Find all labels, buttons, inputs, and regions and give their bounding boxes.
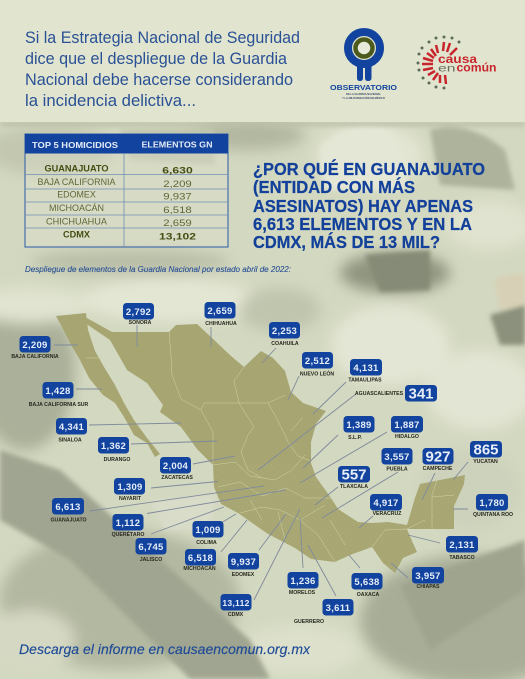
heading: question	[253, 158, 485, 252]
heading: question: ¿POR QUÉ EN GUANAJUATO	[253, 158, 485, 179]
map of Mexico	[56, 313, 470, 575]
state: Tamaulipas	[348, 359, 382, 384]
state: Sinaloa	[56, 418, 87, 444]
state: Oaxaca	[352, 573, 382, 598]
state: Jalisco: JALISCO	[140, 557, 162, 563]
table rows: CHICHUAHUA	[46, 216, 108, 227]
state: Aguascalientes: AGUASCALIENTES	[355, 391, 404, 397]
state: Nuevo León	[300, 352, 334, 378]
intro text: Si la Estrategia Nacional de Seguridad	[25, 29, 300, 47]
heading: question: CDMX, MÁS DE 13 MIL?	[253, 231, 440, 252]
state: Quintana Roo: 1,780	[479, 498, 505, 509]
state: Colima	[192, 521, 224, 546]
state: CDMX: 13,112	[222, 598, 250, 608]
state: Puebla	[382, 448, 412, 472]
state: Zacatecas: 2,004	[163, 461, 189, 472]
state: Campeche: 927	[425, 448, 451, 466]
state: Coahuila: COAHUILA	[271, 341, 299, 347]
state: Hidalgo: 1,887	[394, 420, 420, 431]
state: Sonora	[123, 303, 154, 326]
state: Oaxaca: OAXACA	[357, 592, 379, 598]
state: Campeche	[422, 448, 454, 472]
state: Sinaloa: SINALOA	[58, 438, 82, 444]
state: Chihuahua: 2,659	[207, 306, 233, 317]
state: Hidalgo: HIDALGO	[395, 434, 419, 440]
state: Tabasco: TABASCO	[449, 555, 475, 561]
table rows: EDOMEX	[57, 190, 96, 201]
state: Guanajuato: 6,613	[55, 502, 81, 513]
table: top 5 homicidios	[25, 134, 228, 247]
table rows: GUANAJUATO	[44, 164, 108, 175]
logo: Causa en Común: causa	[438, 54, 478, 66]
table rows: BAJA CALIFORNIA	[38, 177, 116, 188]
state: Tabasco: 2,131	[449, 540, 475, 551]
state: Veracruz: 4,917	[373, 498, 399, 509]
state: Tabasco	[446, 536, 478, 561]
state: Puebla: PUEBLA	[386, 466, 408, 472]
state: Veracruz	[370, 494, 402, 517]
state: Oaxaca: 5,638	[354, 577, 380, 588]
table rows	[38, 164, 196, 242]
state: Baja California: 2,209	[22, 340, 48, 351]
table header	[25, 134, 228, 154]
state: Quintana Roo	[473, 494, 513, 518]
state: Campeche: CAMPECHE	[423, 466, 453, 472]
state: S.L.P.: 1,389	[346, 420, 372, 431]
state: Puebla: 3,557	[384, 452, 410, 463]
state: Chiapas	[412, 567, 444, 590]
state: Michoacán: MICHOACÁN	[183, 565, 216, 572]
table rows: 2,209	[163, 179, 192, 190]
state: Sonora: SONORA	[129, 320, 152, 326]
logo: Observatorio: DE LA GUARDIA NACIONAL	[346, 92, 381, 96]
state: Yucatán: 865	[473, 442, 499, 458]
state: Morelos: 1,236	[290, 576, 316, 587]
state: Chihuahua: CHIHUAHUA	[205, 321, 237, 327]
state: Jalisco: 6,745	[138, 542, 164, 553]
state: Guerrero: 3,611	[326, 603, 351, 614]
state: Tamaulipas: TAMAULIPAS	[348, 378, 382, 384]
state: Michoacán	[183, 549, 216, 572]
state: Yucatán	[470, 441, 502, 465]
state: Guerrero	[294, 599, 354, 625]
state: CDMX	[220, 594, 252, 618]
state: Guanajuato	[50, 498, 87, 524]
state: Yucatán: YUCATAN	[473, 459, 498, 465]
state: S.L.P.: S.L.P.	[348, 435, 362, 441]
state: Nayarit: NAYARIT	[119, 496, 142, 502]
state: Tlaxcala: 557	[341, 466, 367, 484]
state: Edomex: 9,937	[231, 557, 256, 568]
logo: Causa en Común: común	[456, 62, 496, 74]
intro text: la incidencia delictiva...	[25, 92, 196, 110]
logo: Causa en Común	[416, 36, 496, 90]
state: Aguascalientes	[355, 385, 437, 402]
heading: question: (ENTIDAD CON MÁS	[253, 176, 415, 197]
state: Veracruz: VERACRUZ	[373, 511, 402, 517]
state: Baja California: BAJA CALIFORNIA	[11, 354, 59, 360]
state: Guanajuato: GUANAJUATO	[50, 518, 87, 524]
state: Tamaulipas: 4,131	[353, 363, 379, 374]
table rows: 2,659	[163, 218, 192, 229]
state: Nayarit: 1,309	[117, 482, 143, 493]
state: Guerrero: GUERRERO	[294, 619, 324, 625]
state: Aguascalientes: 341	[408, 386, 434, 402]
state: Zacatecas	[160, 457, 193, 481]
table header: ELEMENTOS GN	[142, 140, 212, 150]
state: Durango	[98, 437, 130, 463]
table rows: 6,518	[163, 205, 192, 216]
connector lines	[54, 325, 468, 600]
state: Baja California	[11, 336, 59, 360]
logo: Observatorio: OBSERVATORIO	[330, 85, 398, 92]
logo: Causa en Común: en	[438, 62, 456, 74]
table header: TOP 5 HOMICIDIOS	[32, 140, 118, 150]
state: Hidalgo	[391, 416, 423, 440]
heading: question: ASESINATOS) HAY APENAS	[253, 196, 473, 216]
state: Chiapas: 3,957	[415, 571, 441, 582]
state: Querétaro: 1,112	[116, 518, 140, 529]
state: Querétaro	[112, 514, 144, 538]
state: Coahuila: 2,253	[272, 326, 297, 337]
state: Baja California Sur: 1,428	[45, 386, 71, 397]
state: Baja California Sur: BAJA CALIFORNIA SUR	[29, 402, 89, 408]
table rows: 6,630	[162, 165, 193, 176]
map caption: Despliegue de elementos de la Guardia Nacional por estado abril de 2022:	[25, 265, 291, 274]
state: Edomex: EDOMEX	[232, 572, 255, 578]
state: Quintana Roo: QUINTANA ROO	[473, 512, 513, 518]
state: Morelos: MORELOS	[289, 590, 316, 596]
heading: question: 6,613 ELEMENTOS Y EN LA	[253, 214, 472, 234]
state: Morelos	[288, 572, 318, 596]
state: Sinaloa: 4,341	[59, 422, 85, 433]
table rows: 13,102	[159, 231, 196, 242]
state: Nuevo León: 2,512	[305, 356, 330, 367]
logo: Observatorio: Y LA MILITARIZACIÓN EN MÉXICO	[342, 95, 385, 100]
state: Tlaxcala: TLAXCALA	[340, 484, 368, 490]
intro text: dice que el despliegue de la Guardia	[25, 50, 288, 68]
state: Sonora: 2,792	[126, 307, 151, 318]
intro text: Nacional debe hacerse considerando	[25, 71, 293, 89]
state: Baja California Sur	[29, 382, 89, 408]
state: Tlaxcala	[338, 466, 370, 490]
state: Nayarit	[114, 478, 145, 502]
table rows: CDMX	[63, 230, 91, 241]
state: Edomex	[228, 553, 259, 578]
state: Querétaro: QUERÉTARO	[112, 530, 144, 538]
state: Durango: DURANGO	[104, 457, 130, 463]
state: Zacatecas: ZACATECAS	[161, 475, 193, 481]
state: Colima: COLIMA	[196, 540, 217, 546]
state: S.L.P.	[344, 416, 374, 441]
state: Durango: 1,362	[101, 441, 126, 452]
state: Chiapas: CHIAPAS	[417, 584, 440, 590]
state: Colima: 1,009	[195, 525, 221, 536]
state: CDMX: CDMX	[228, 612, 244, 618]
state: Chihuahua	[204, 302, 237, 327]
logo: Observatorio	[330, 32, 398, 100]
state: Jalisco	[136, 538, 166, 563]
state: Coahuila	[269, 322, 300, 347]
intro text	[25, 29, 300, 110]
state: Michoacán: 6,518	[188, 553, 213, 564]
table rows: MICHOACÁN	[49, 203, 104, 214]
table rows: 9,937	[163, 192, 192, 203]
state: Nuevo León: NUEVO LEÓN	[300, 370, 334, 378]
download link text: Descarga el informe en causaencomun.org.mx	[19, 641, 311, 657]
